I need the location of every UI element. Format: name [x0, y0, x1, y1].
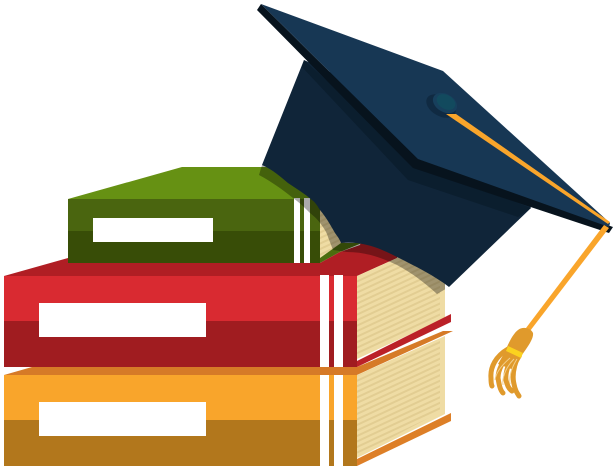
orange book spine stripes: [320, 375, 343, 466]
red book pages: [357, 250, 445, 359]
red book label: [39, 303, 206, 337]
cap body shade under board: [302, 60, 531, 217]
tassel band: [506, 346, 523, 358]
orange book label: [39, 402, 206, 436]
tassel knot: [507, 328, 533, 355]
cap cord on board: [446, 114, 610, 224]
green book pages: [320, 200, 345, 258]
orange book: [4, 331, 453, 466]
board top: [261, 4, 610, 227]
cap shadow on books: [259, 165, 449, 294]
green book lower cover: [320, 243, 362, 263]
button: [422, 89, 461, 123]
tassel strands: [491, 349, 519, 396]
tassel strand mass: [498, 350, 522, 370]
orange book lower cover: [357, 413, 451, 466]
graduation cap: [257, 4, 613, 287]
board underside edge: [257, 4, 613, 233]
red book: [4, 238, 451, 367]
tassel highlights: [495, 358, 517, 385]
red book spine stripes: [320, 275, 343, 367]
cap body: [262, 60, 531, 287]
green book spine stripes: [294, 198, 310, 263]
tassel cord: [526, 225, 609, 331]
tassel: [491, 225, 609, 396]
green book label: [93, 218, 213, 242]
orange book pages: [357, 336, 445, 458]
red book lower cover: [357, 314, 451, 367]
green book: [68, 167, 362, 263]
